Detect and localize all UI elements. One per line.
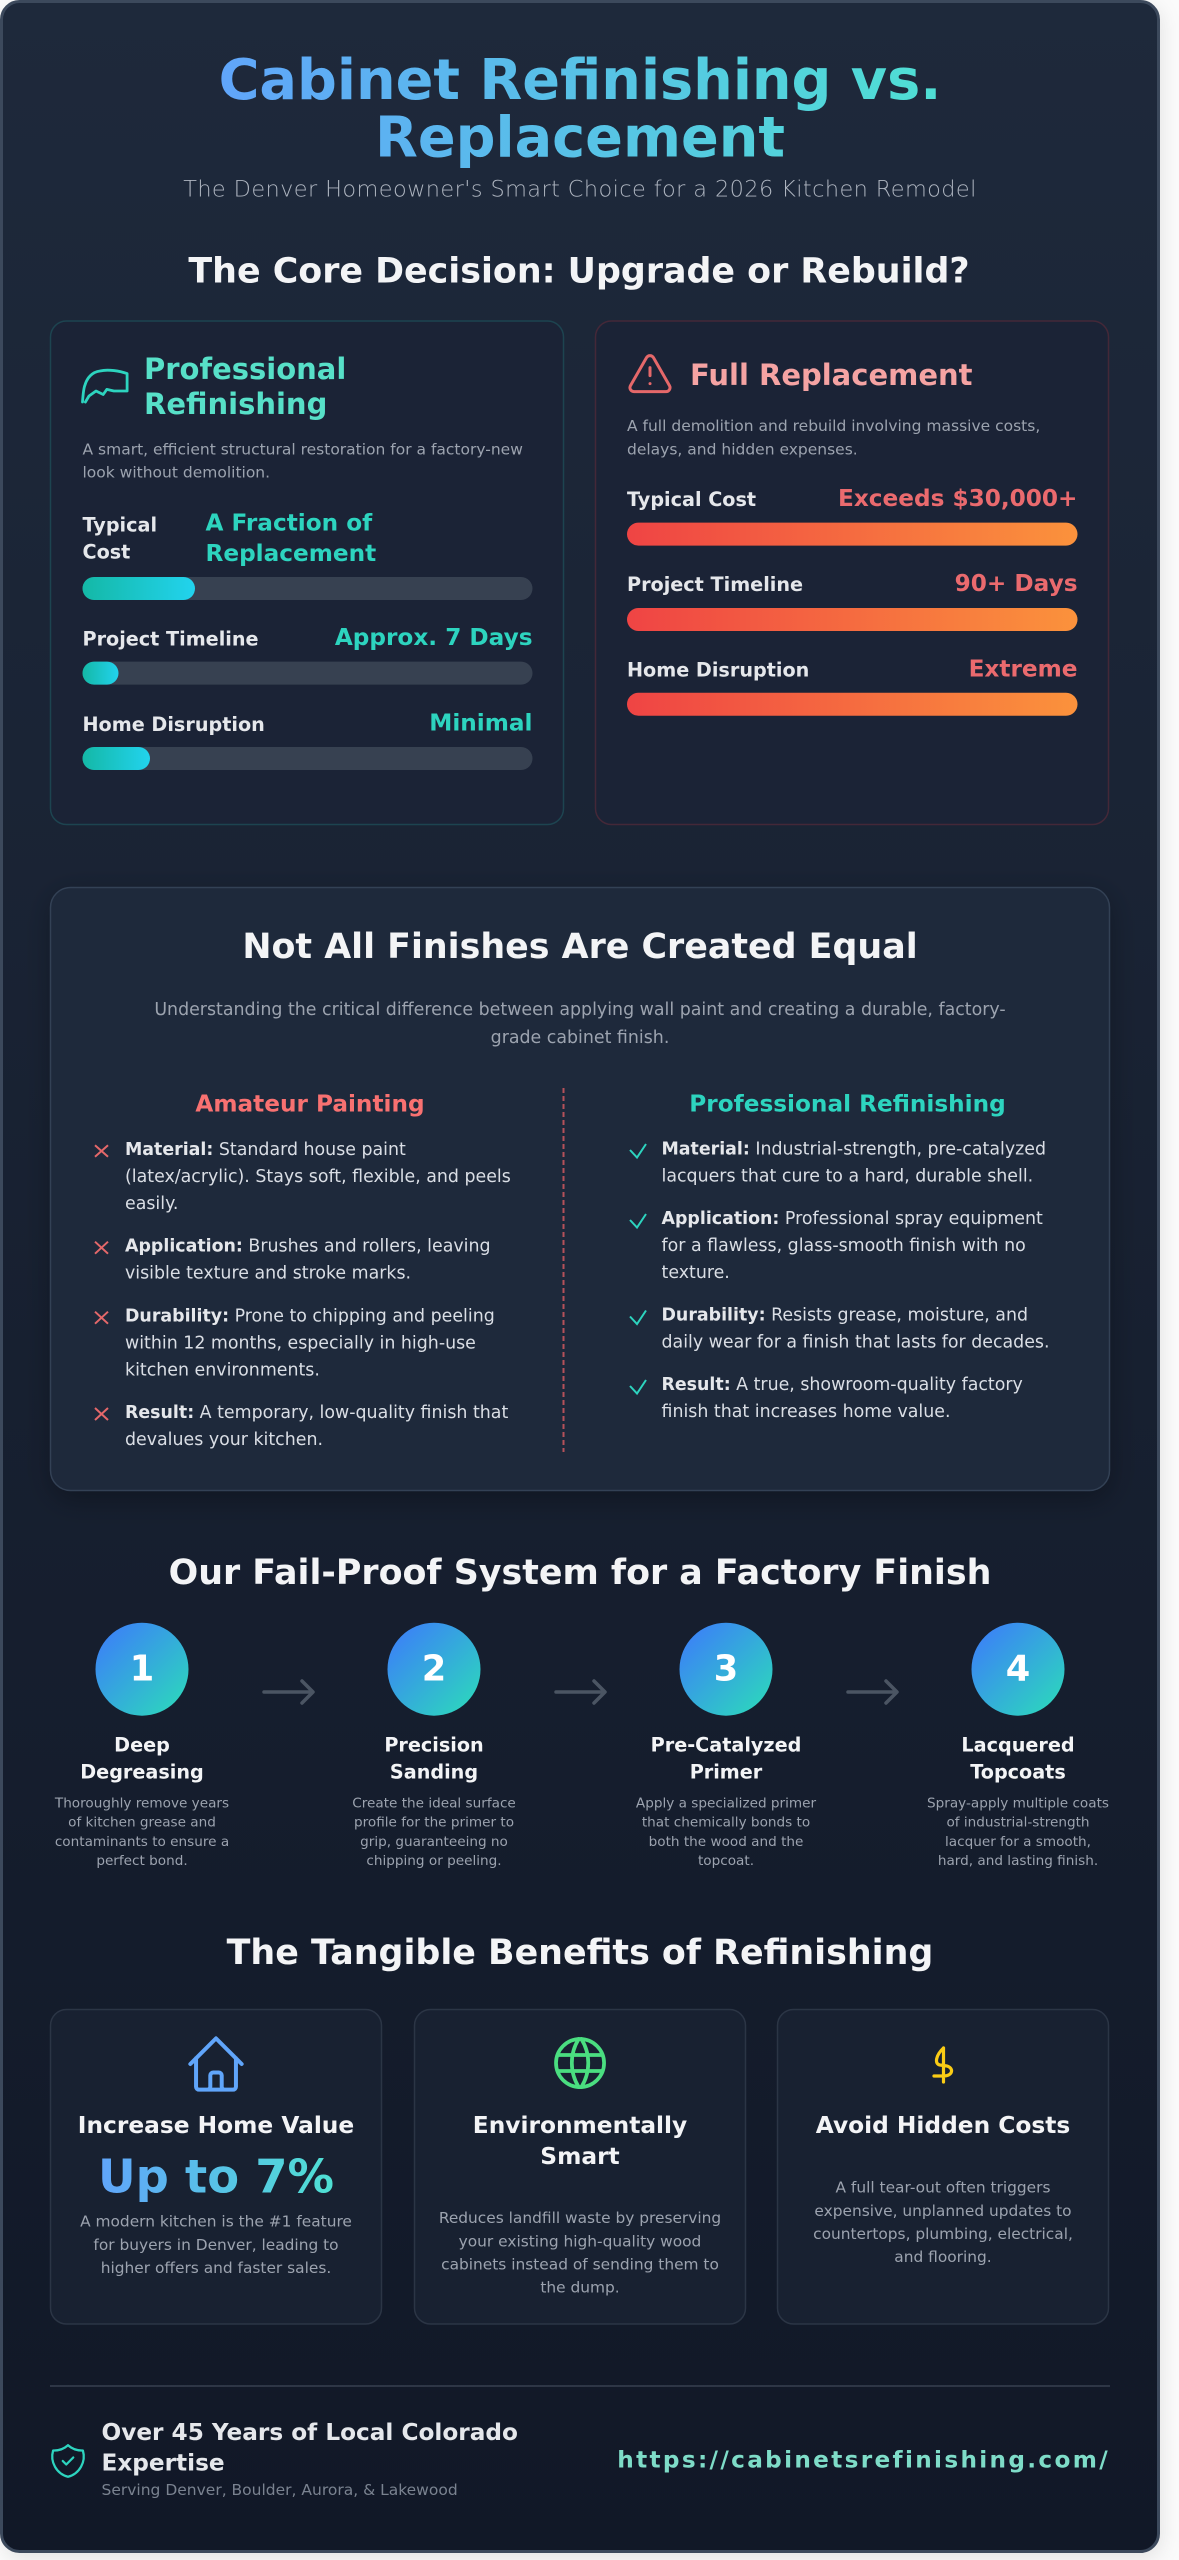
metric: typical cost: Cost [82, 540, 130, 564]
step 3: both the wood and the [649, 1834, 803, 1850]
benefit title: Smart [540, 2143, 620, 2170]
step 1: 1 [130, 1648, 154, 1690]
item: result: finish that increases home value. [662, 1402, 951, 1422]
metric: project timeline [82, 624, 532, 685]
metric: project timeline [627, 570, 1078, 631]
heading: Not All Finishes Are Created Equal [242, 927, 918, 967]
intro text [154, 1000, 1006, 1048]
benefit title: Increase Home Value [78, 2112, 354, 2139]
title: Cabinet Refinishing vs. [219, 48, 941, 113]
step 2: grip, guaranteeing no [360, 1834, 508, 1850]
item: application: Application: Professional spray equipment [662, 1209, 1043, 1229]
step 2: Create the ideal surface [352, 1795, 516, 1811]
item: durability: kitchen environments. [125, 1360, 320, 1380]
title: Replacement [375, 106, 785, 170]
item: durability [95, 1307, 495, 1380]
heading: core decision: The Core Decision: Upgrade or Rebuild? [188, 252, 970, 292]
intro text: grade cabinet finish. [491, 1028, 669, 1048]
panel: environmentally smart [414, 2010, 746, 2324]
description [82, 441, 523, 482]
step 1 [54, 1623, 229, 1869]
metric: typical cost: Replacement [206, 540, 376, 567]
description: A smart, efficient structural restoration for a factory-new [82, 441, 523, 459]
item: application [630, 1209, 1043, 1283]
step 3: that chemically bonds to [642, 1815, 810, 1831]
footer: expertise: Over 45 Years of Local Colorado [102, 2419, 518, 2446]
step 2: Sanding [390, 1760, 478, 1783]
icon: globe [556, 2039, 604, 2087]
arrow [264, 1681, 313, 1703]
item: durability: Durability: Resists grease, moisture, and [662, 1306, 1028, 1326]
description: expensive, unplanned updates to [814, 2202, 1072, 2220]
step 4: hard, and lasting finish. [938, 1853, 1098, 1869]
description: the dump. [540, 2279, 620, 2297]
metric: project timeline: 90+ Days [955, 570, 1078, 597]
description: A full tear-out often triggers [836, 2179, 1050, 2197]
step 3: Pre-Catalyzed [651, 1734, 801, 1757]
metric: typical cost: A Fraction of [206, 509, 373, 536]
column heading: amateur painting: Amateur Painting [195, 1091, 425, 1118]
description: higher offers and faster sales. [101, 2259, 331, 2277]
footer: expertise: Serving Denver, Boulder, Aurora, & Lakewood [102, 2481, 458, 2499]
metric: project timeline: Project Timeline [82, 627, 259, 650]
card title: Full Replacement [690, 358, 973, 392]
step 4: 4 [1006, 1648, 1030, 1690]
description: cabinets instead of sending them to [441, 2256, 719, 2274]
card title [144, 352, 346, 421]
step 4: Spray-apply multiple coats [927, 1795, 1109, 1811]
step 2: 2 [422, 1648, 446, 1690]
step 1: Deep [114, 1734, 170, 1757]
panel: increase home value [50, 2010, 382, 2324]
step 2 [352, 1623, 516, 1869]
description: delays, and hidden expenses. [627, 440, 858, 458]
metric: typical cost [82, 509, 532, 600]
metric: home disruption: Home Disruption [82, 713, 265, 736]
step 3: Primer [690, 1760, 763, 1783]
item: result [630, 1375, 1023, 1422]
item: durability: daily wear for a finish that lasts for decades. [662, 1333, 1050, 1353]
item: material [95, 1140, 511, 1214]
item: result: Result: A temporary, low-quality finish that [125, 1403, 508, 1423]
metric: home disruption: Extreme [969, 656, 1078, 682]
step 4 [927, 1623, 1109, 1869]
item: result: devalues your kitchen. [125, 1430, 323, 1450]
item: application [95, 1237, 491, 1284]
metric: typical cost: Typical [82, 513, 157, 536]
icon: paint brush [82, 370, 127, 402]
description: A modern kitchen is the #1 feature [80, 2213, 352, 2231]
description: Reduces landfill waste by preserving [439, 2209, 721, 2227]
step 4: of industrial-strength [946, 1815, 1090, 1831]
icon: shield [52, 2445, 84, 2477]
step 3: topcoat. [698, 1853, 754, 1869]
item: application: for a flawless, glass-smooth finish with no [662, 1236, 1026, 1256]
item: durability: Durability: Prone to chipping and peeling [125, 1307, 495, 1327]
metric: typical cost: Typical Cost [627, 488, 756, 511]
footer: expertise: Expertise [102, 2450, 225, 2477]
card title: Professional [144, 352, 346, 386]
benefit title: Environmentally [473, 2112, 687, 2139]
step 4: Lacquered [961, 1734, 1075, 1757]
subtitle: The Denver Homeowner's Smart Choice for a 2026 Kitchen Remodel [183, 177, 977, 203]
step 1: of kitchen grease and [68, 1815, 216, 1831]
step 4: lacquer for a smooth, [945, 1834, 1091, 1850]
description: look without demolition. [82, 464, 270, 482]
heading: benefits: The Tangible Benefits of Refinishing [227, 1933, 933, 1973]
metric: typical cost [627, 485, 1078, 546]
item: material: Material: Standard house paint [125, 1140, 406, 1160]
item: application: Application: Brushes and rollers, leaving [125, 1237, 491, 1257]
icon: dollar [934, 2048, 952, 2082]
description: for buyers in Denver, leading to [93, 2236, 339, 2254]
description: your existing high-quality wood [459, 2232, 701, 2250]
panel: finishes comparison [50, 888, 1110, 1499]
step 2: chipping or peeling. [366, 1853, 502, 1869]
description [813, 2179, 1073, 2266]
item: material: (latex/acrylic). Stays soft, flexible, and peels [125, 1167, 511, 1187]
step 1: Thoroughly remove years [54, 1795, 229, 1811]
description: countertops, plumbing, electrical, [813, 2225, 1073, 2243]
item: material: Material: Industrial-strength, pre-catalyzed [662, 1139, 1046, 1159]
metric: project timeline: Approx. 7 Days [335, 624, 532, 651]
step 1: Degreasing [80, 1760, 204, 1783]
description [627, 417, 1040, 458]
panel: full replacement [596, 321, 1108, 824]
metric: home disruption [627, 656, 1078, 716]
description [439, 2209, 721, 2297]
metric: home disruption: Minimal [429, 710, 532, 736]
list: professional refinishing [630, 1139, 1050, 1422]
column heading: professional refinishing: Professional Refinishing [689, 1091, 1006, 1118]
item: material: easily. [125, 1194, 178, 1214]
benefit title: Avoid Hidden Costs [816, 2112, 1070, 2139]
arrow [556, 1681, 605, 1703]
metric: home disruption [82, 710, 532, 770]
panel: avoid hidden costs [778, 2010, 1108, 2324]
item: durability [630, 1306, 1050, 1353]
footer: url: https://cabinetsrefinishing.com/ [617, 2447, 1110, 2474]
step 4: Topcoats [970, 1760, 1066, 1783]
step 3: Apply a specialized primer [636, 1795, 817, 1811]
heading: process: Our Fail-Proof System for a Factory Finish [169, 1553, 991, 1593]
step 3: 3 [714, 1648, 738, 1690]
benefit title [473, 2112, 687, 2170]
item: result: Result: A true, showroom-quality factory [662, 1375, 1023, 1395]
step 1: perfect bond. [96, 1853, 188, 1869]
panel: professional refinishing [50, 321, 564, 824]
footer: expertise [52, 2419, 518, 2499]
item: durability: within 12 months, especially in high-use [125, 1334, 476, 1354]
item: material [630, 1139, 1046, 1187]
icon: warning triangle [630, 356, 670, 392]
icon: house [190, 2038, 242, 2090]
metric: home disruption: Home Disruption [627, 658, 809, 682]
item: application: visible texture and stroke marks. [125, 1264, 411, 1284]
title [219, 48, 941, 170]
intro text: Understanding the critical difference between applying wall paint and creating a durable, factory- [154, 1000, 1006, 1020]
description: A full demolition and rebuild involving massive costs, [627, 417, 1040, 435]
metric: typical cost: Exceeds $30,000+ [838, 485, 1078, 512]
card title: Refinishing [144, 387, 327, 421]
item: material: lacquers that cure to a hard, durable shell. [662, 1167, 1033, 1187]
step 3 [636, 1623, 817, 1869]
step 2: Precision [384, 1734, 484, 1757]
description [80, 2213, 352, 2277]
metric: project timeline: Project Timeline [627, 573, 803, 596]
step 1: contaminants to ensure a [55, 1834, 229, 1850]
arrow [848, 1681, 897, 1703]
list: amateur painting [95, 1140, 511, 1450]
item: result [95, 1403, 508, 1450]
step 2: profile for the primer to [354, 1815, 514, 1831]
item: application: texture. [662, 1263, 730, 1283]
description: and flooring. [894, 2248, 992, 2266]
stat: Up to 7% [98, 2150, 334, 2204]
